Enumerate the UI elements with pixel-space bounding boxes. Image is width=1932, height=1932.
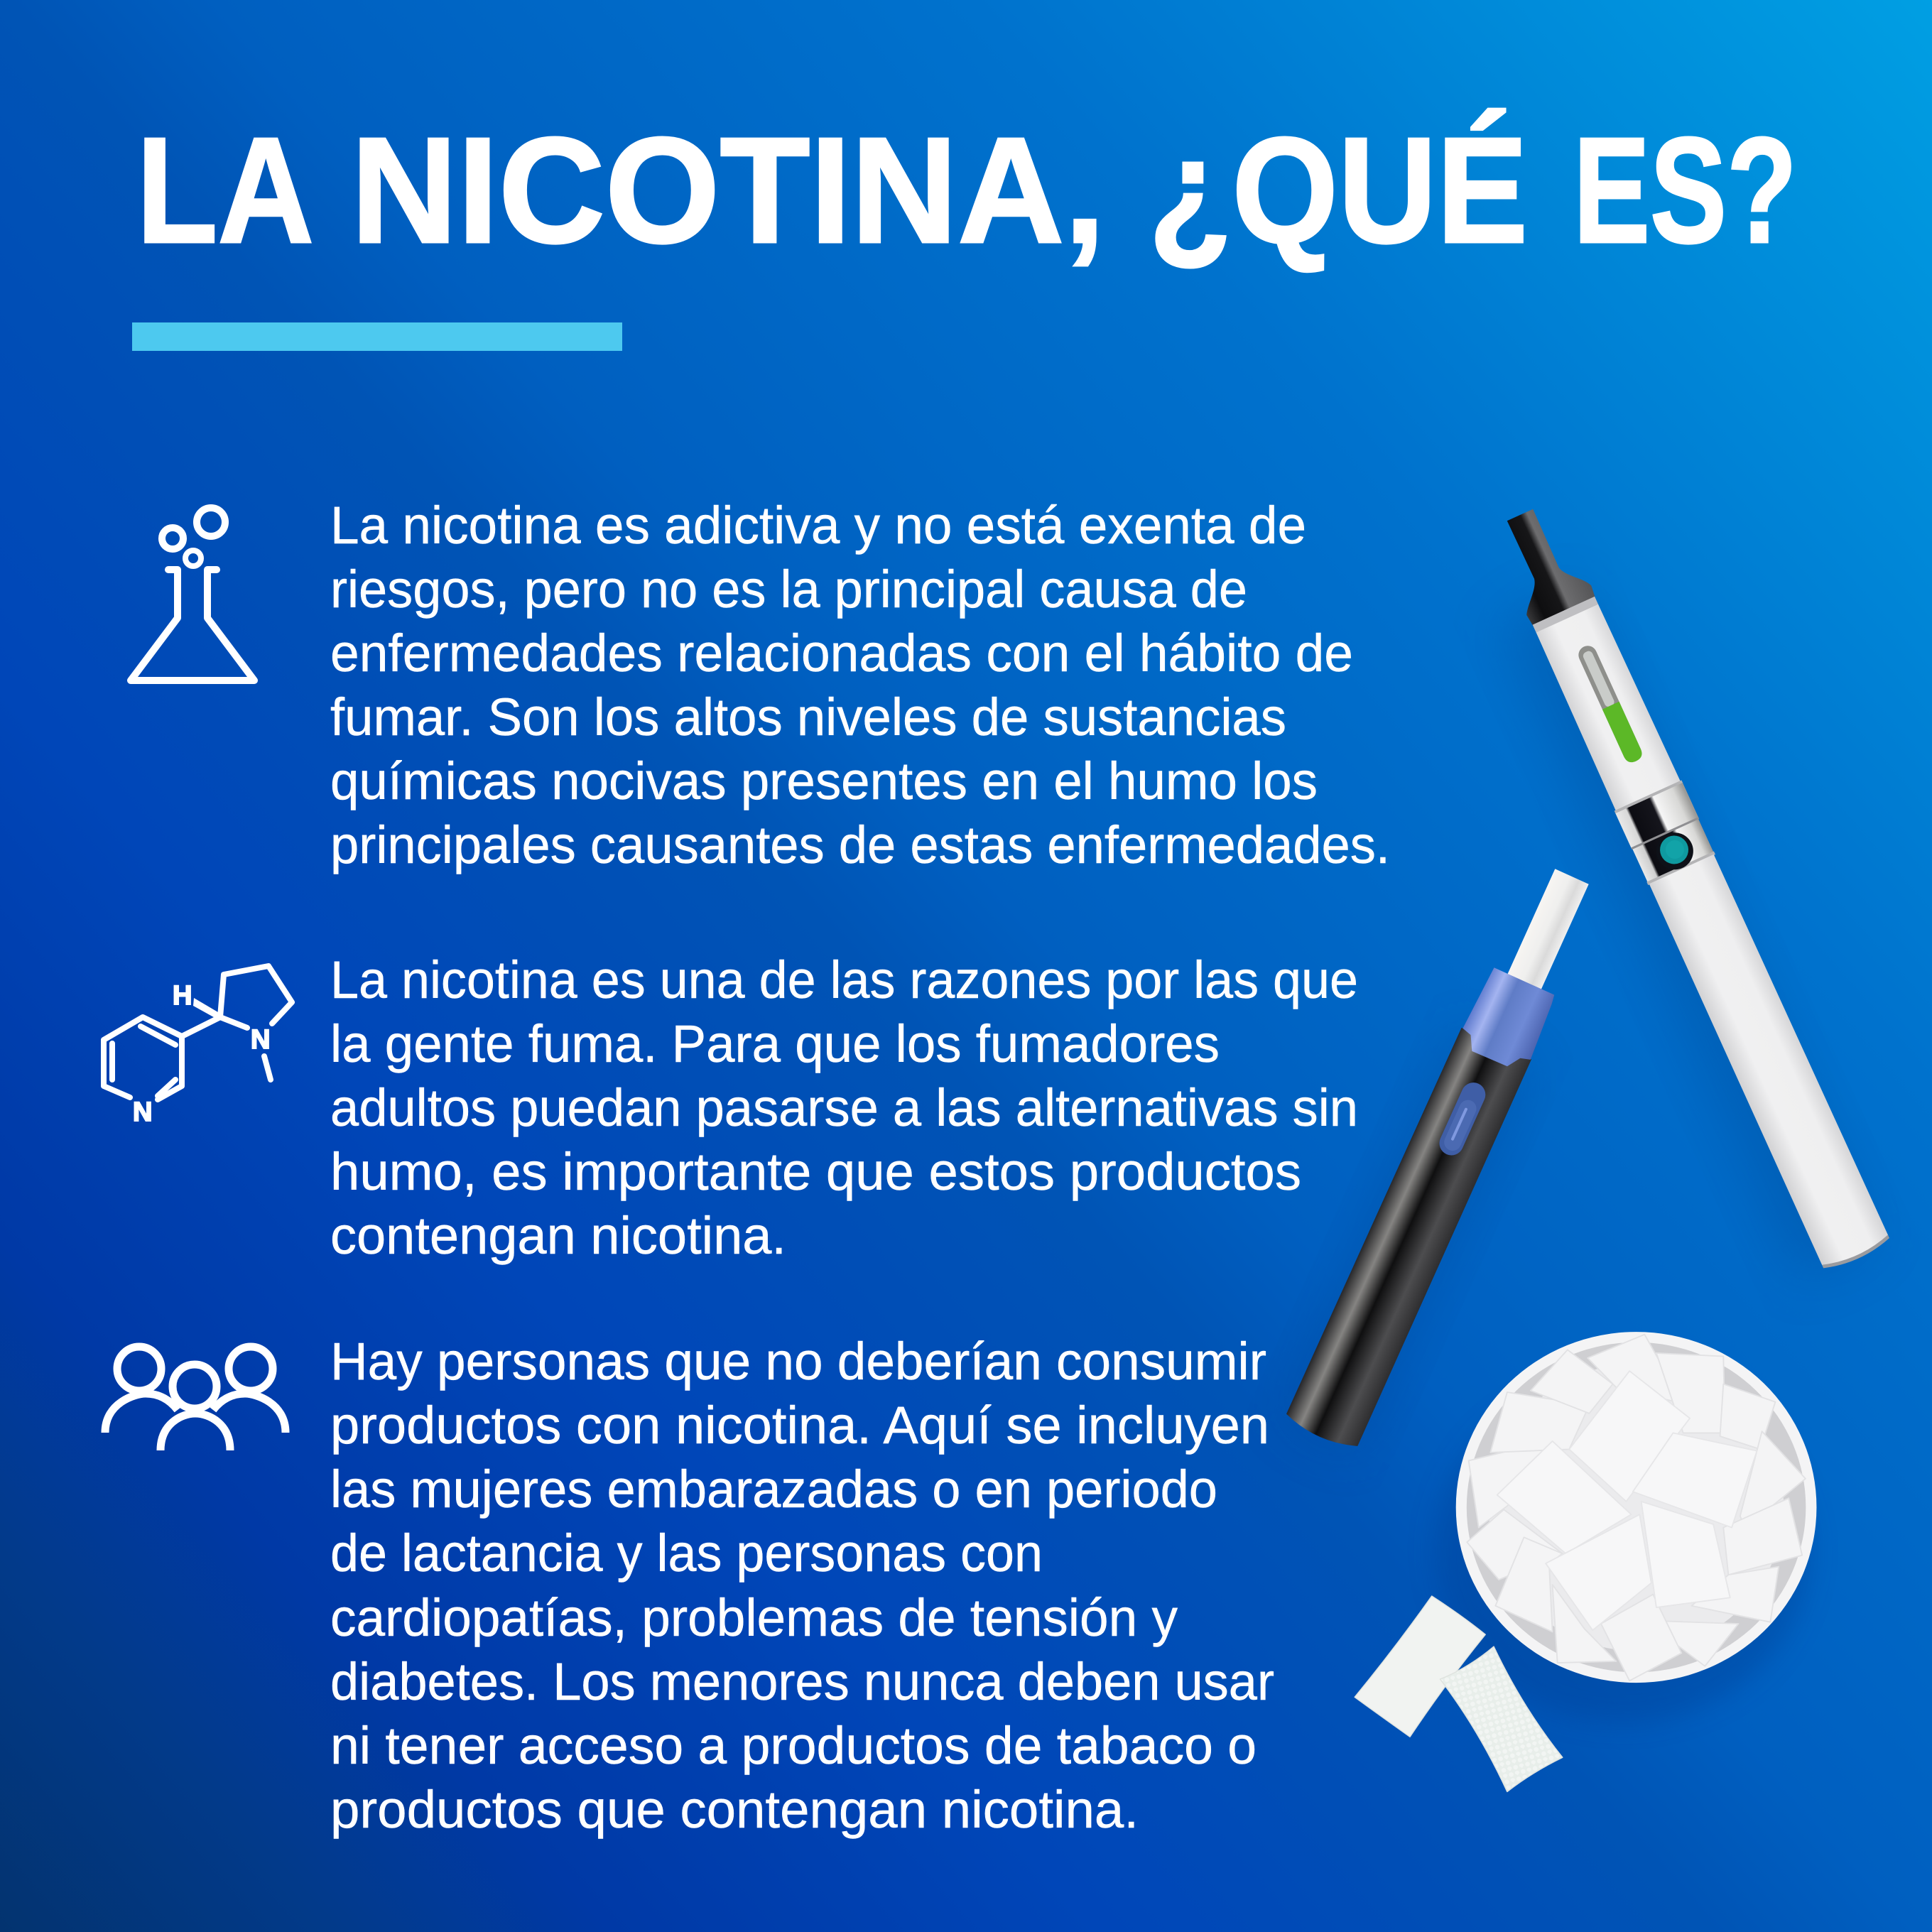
text: paragraph three: Hay personas que no deberían consumir <box>330 1332 1266 1391</box>
product: bowl of nicotine pouches <box>1355 1332 1816 1791</box>
panel: addiction and risks <box>131 496 1390 874</box>
text: paragraph two <box>330 950 1358 1265</box>
icon: nicotine molecule: N <box>133 1097 152 1127</box>
title: ¿QUÉ <box>1149 106 1528 274</box>
text: paragraph three: diabetes. Los menores nunca deben usar <box>330 1652 1274 1711</box>
text: paragraph one: riesgos, pero no es la principal causa de <box>330 560 1247 619</box>
text: paragraph three: productos que contengan nicotina. <box>330 1780 1139 1839</box>
panel: who should not use nicotine <box>105 1332 1274 1839</box>
text: paragraph two: adultos puedan pasarse a las alternativas sin <box>330 1078 1358 1137</box>
product: white e-cigarette <box>1462 499 1892 1285</box>
product: black heated-tobacco device with stick <box>1284 860 1607 1453</box>
text: paragraph one: enfermedades relacionadas con el hábito de <box>330 624 1353 683</box>
text: paragraph one: La nicotina es adictiva y no está exenta de <box>330 496 1306 555</box>
text: paragraph three: las mujeres embarazadas o en periodo <box>330 1460 1217 1519</box>
title: NICOTINA, <box>351 106 1105 274</box>
text: paragraph three: cardiopatías, problemas de tensión y <box>330 1588 1178 1647</box>
title <box>136 106 1797 274</box>
icon: nicotine molecule <box>104 966 292 1127</box>
title accent bar <box>132 322 622 351</box>
text: paragraph three: de lactancia y las personas con <box>330 1524 1043 1583</box>
text: paragraph three: ni tener acceso a productos de tabaco o <box>330 1716 1257 1775</box>
icon: flask with bubbles <box>131 508 254 680</box>
text: paragraph two: humo, es importante que estos productos <box>330 1142 1301 1201</box>
icon: nicotine molecule: N <box>251 1025 270 1055</box>
icon: group of people <box>105 1347 286 1450</box>
panel: why people smoke <box>104 950 1358 1265</box>
text: paragraph one: fumar. Son los altos niveles de sustancias <box>330 688 1286 747</box>
title: ES? <box>1573 106 1797 274</box>
text: paragraph one: principales causantes de estas enfermedades. <box>330 815 1390 874</box>
icon: nicotine molecule: H <box>173 981 192 1011</box>
title: LA <box>136 106 314 274</box>
text: paragraph one <box>330 496 1390 874</box>
text: paragraph one: químicas nocivas presentes en el humo los <box>330 751 1318 810</box>
text: paragraph two: la gente fuma. Para que los fumadores <box>330 1014 1220 1073</box>
text: paragraph two: contengan nicotina. <box>330 1206 786 1265</box>
text: paragraph three: productos con nicotina. Aquí se incluyen <box>330 1396 1269 1455</box>
text: paragraph two: La nicotina es una de las razones por las que <box>330 950 1358 1009</box>
loose pouches <box>1355 1596 1563 1791</box>
text: paragraph three <box>330 1332 1274 1839</box>
